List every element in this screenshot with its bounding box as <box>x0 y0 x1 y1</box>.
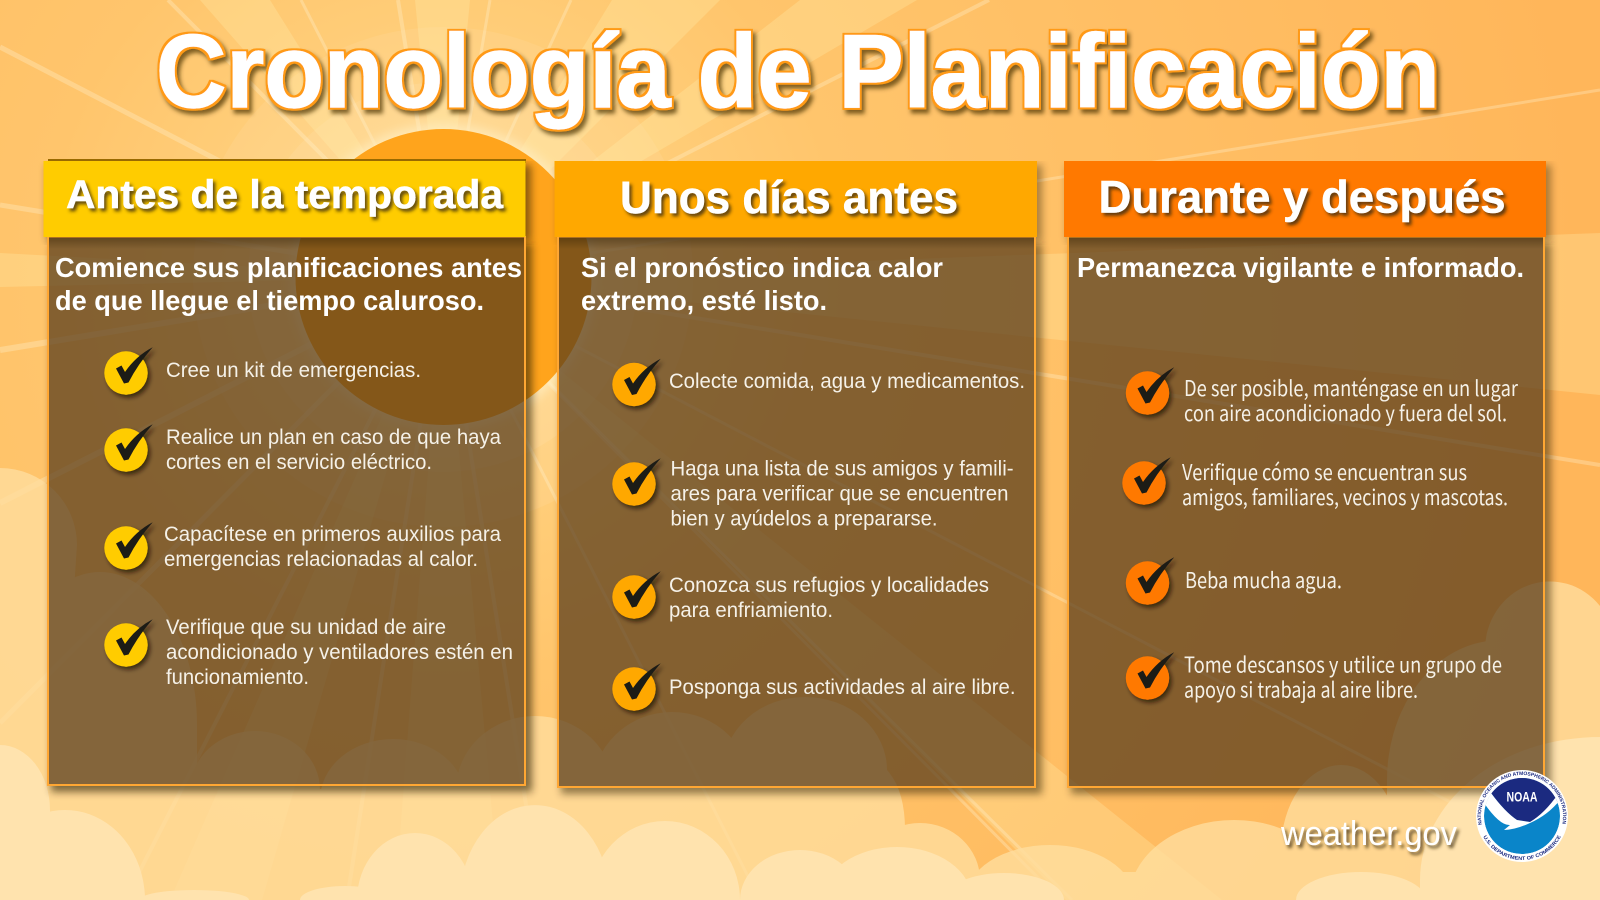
item: actividades: Posponga sus actividades al aire libre. <box>669 675 1016 699</box>
item: verificar familiares: amigos, familiares, vecinos y mascotas. <box>1182 481 1508 512</box>
panel 3 header <box>1064 161 1546 249</box>
panel 1 header: Antes de la temporada <box>66 173 504 217</box>
item: plan cortes: Realice un plan en caso de que haya <box>166 425 501 449</box>
panel 1 subheading: Comience sus planificaciones antes <box>55 252 522 283</box>
item: comida y agua <box>612 359 1025 406</box>
item: plan cortes: cortes en el servicio eléctrico. <box>166 450 432 474</box>
panel 2 subheading: Si el pronóstico indica calor <box>581 252 943 283</box>
panel 3 subheading: Permanezca vigilante e informado. <box>1077 252 1524 283</box>
item: refugios: para enfriamiento. <box>669 598 833 622</box>
item: descansos <box>1126 648 1502 704</box>
panel 1 subheading <box>55 252 522 316</box>
panel 2 subheading: extremo, esté listo. <box>581 285 827 316</box>
clouds: back layer <box>0 468 1600 900</box>
item: lista de amigos: Haga una lista de sus amigos y famili- <box>670 456 1014 480</box>
item: primeros auxilios <box>104 522 501 571</box>
panel 2 subheading <box>581 252 943 316</box>
panel 2 header: Unos días antes <box>620 172 958 223</box>
item: plan cortes <box>104 424 501 474</box>
panel: antes de la temporada <box>44 159 526 785</box>
item: aire acondicionado: funcionamiento. <box>166 665 309 689</box>
item: descansos: Tome descansos y utilice un grupo de <box>1184 648 1502 680</box>
panel shadows <box>47 165 1551 794</box>
panel 3 body <box>1068 237 1544 787</box>
panel: unos días antes <box>554 161 1037 787</box>
panel 1 subheading: de que llegue el tiempo caluroso. <box>55 285 484 316</box>
item: aire acondicionado: Verifique que su unidad de aire <box>166 615 446 639</box>
item: lista de amigos <box>612 456 1014 530</box>
item: lista de amigos: ares para verificar que se encuentren <box>670 482 1008 506</box>
item: aire acondicionado <box>104 615 513 689</box>
panel 1 header <box>44 159 526 249</box>
weather.gov label: weather.gov <box>1280 815 1457 853</box>
sun <box>290 124 596 430</box>
item: agua: Beba mucha agua. <box>1185 564 1342 595</box>
icon: NOAA logo <box>1476 770 1568 862</box>
item: verificar familiares: Verifique cómo se encuentran sus <box>1182 456 1467 487</box>
item: lugar con aire <box>1126 367 1519 428</box>
item: agua <box>1126 557 1342 605</box>
panel: durante y después <box>1064 161 1546 787</box>
clouds: front layer <box>0 737 1600 900</box>
item: lista de amigos: bien y ayúdelos a prepararse. <box>670 506 938 530</box>
item: primeros auxilios: emergencias relacionadas al calor. <box>164 547 478 571</box>
item: refugios: Conozca sus refugios y localidades <box>669 573 989 597</box>
icon: NOAA logo: NATIONAL OCEANIC AND ATMOSPHERIC ADMINISTRATION <box>1478 772 1566 825</box>
icon: NOAA logo: NOAA <box>1506 790 1538 804</box>
item: actividades <box>612 663 1016 711</box>
item: lugar con aire: De ser posible, manténgase en un lugar <box>1184 372 1519 403</box>
item: comida y agua: Colecte comida, agua y medicamentos. <box>669 369 1025 393</box>
item: primeros auxilios: Capacítese en primeros auxilios para <box>164 522 501 546</box>
icon: NOAA logo: U.S. DEPARTMENT OF COMMERCE <box>1484 835 1561 860</box>
item: aire acondicionado: acondicionado y ventiladores estén en <box>166 640 513 664</box>
item: kit de emergencias <box>104 347 421 395</box>
panel 2 body <box>558 237 1035 787</box>
item: descansos: apoyo si trabaja al aire libre. <box>1184 674 1418 704</box>
panel 2 header <box>554 161 1037 249</box>
item: kit de emergencias: Cree un kit de emergencias. <box>166 358 421 382</box>
panel 3 header: Durante y después <box>1098 172 1506 222</box>
item: verificar familiares <box>1122 456 1508 512</box>
item: refugios <box>612 571 989 622</box>
title: Cronología de Planificación <box>156 14 1440 130</box>
panel 1 body <box>48 237 525 785</box>
item: lugar con aire: con aire acondicionado y fuera del sol. <box>1184 397 1507 428</box>
